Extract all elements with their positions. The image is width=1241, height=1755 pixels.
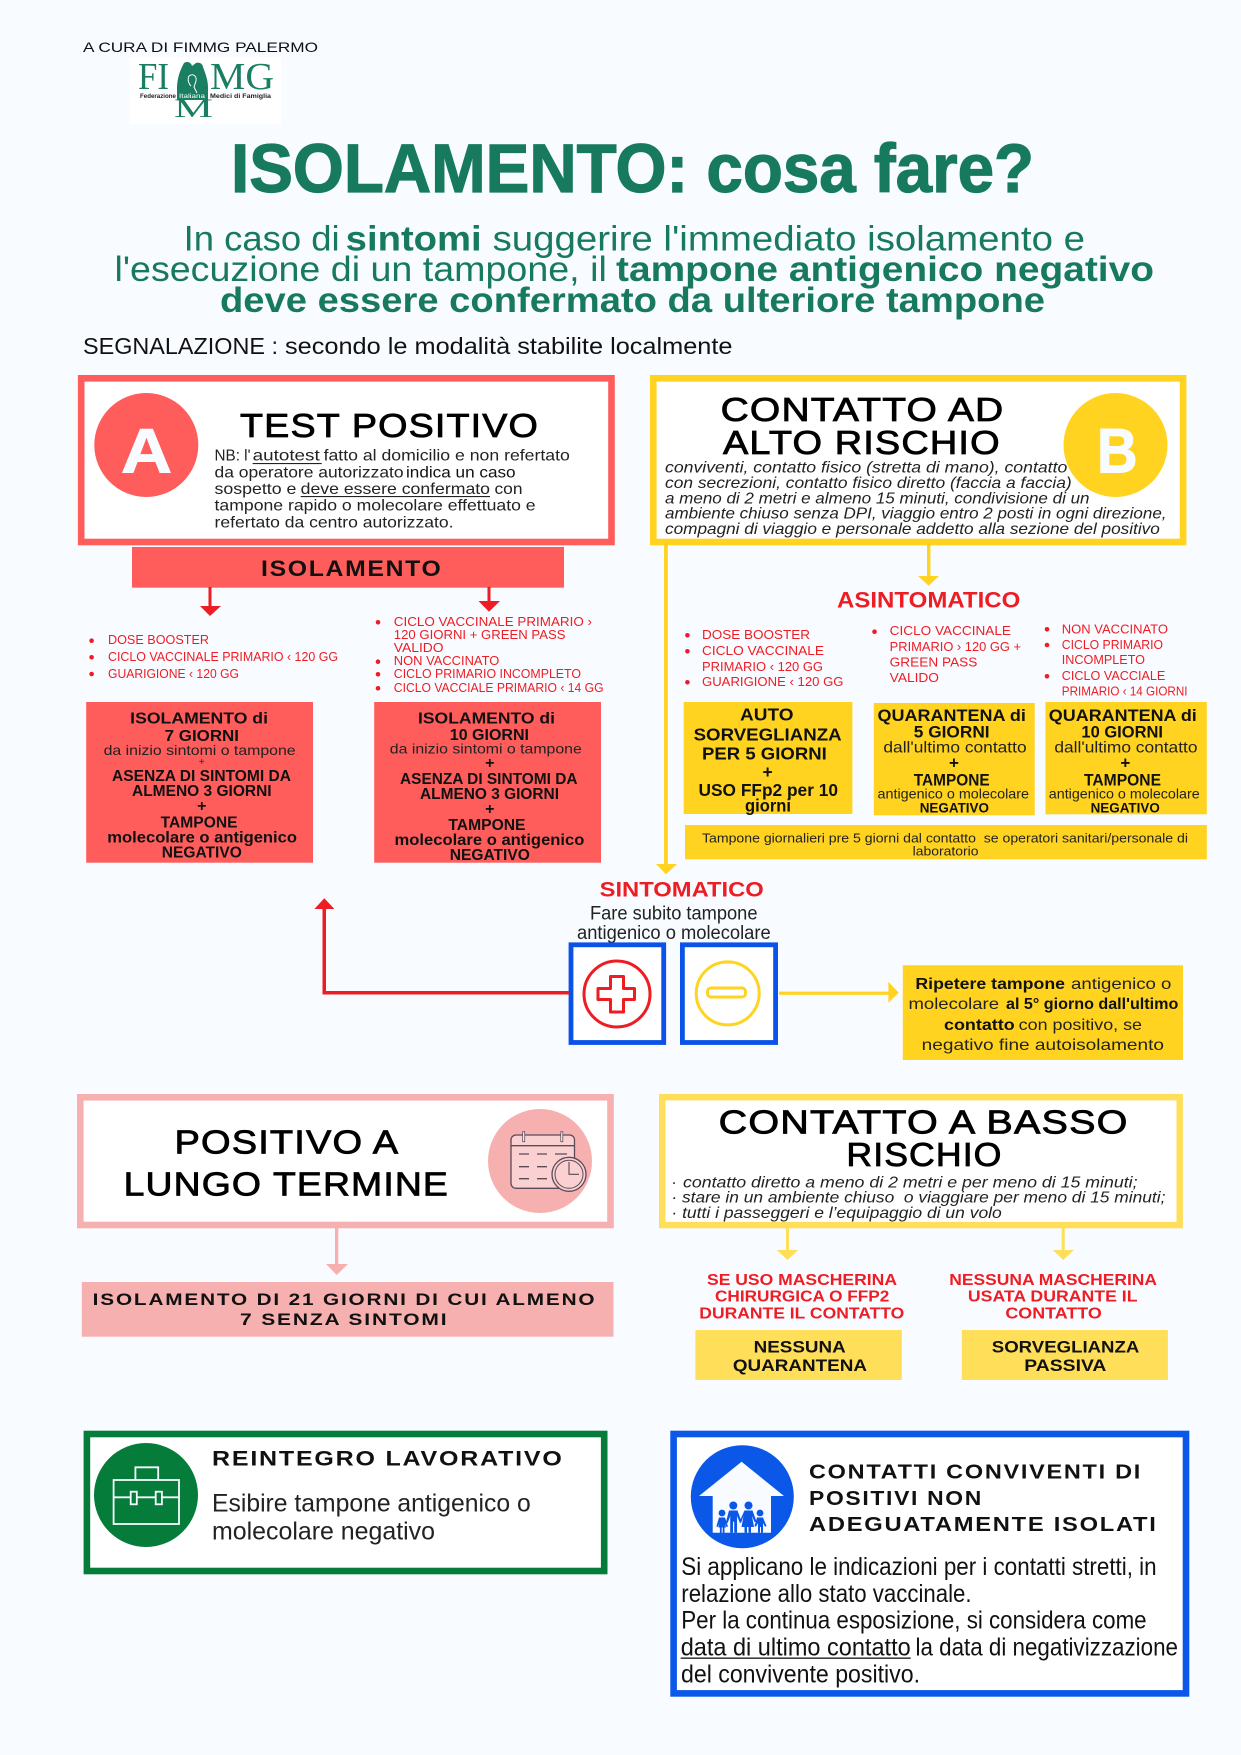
box: isolamento 21 giorni: 7 SENZA SINTOMI xyxy=(240,1310,448,1329)
definition list: · tutti i passeggeri e l’equipaggio di un volo xyxy=(671,1205,1002,1222)
note text: da operatore autorizzato xyxy=(214,465,404,482)
box: quarantena 5 giorni: NEGATIVO xyxy=(920,800,989,816)
box: auto sorveglianza: USO FFp2 per 10 xyxy=(698,780,838,800)
list: quarantena 10 giorni criteria: INCOMPLETO xyxy=(1062,652,1145,667)
box: auto sorveglianza: PER 5 GIORNI xyxy=(702,743,827,763)
panel: contatto a basso rischio xyxy=(662,1097,1180,1225)
box: isolamento 7 giorni: ISOLAMENTO di xyxy=(130,710,268,727)
list: 10-day criteria: 120 GIORNI + GREEN PASS xyxy=(394,627,566,642)
logo: FIMMG: Italiana xyxy=(179,93,205,100)
list: 10-day criteria: CICLO VACCINALE PRIMARIO › xyxy=(394,614,592,629)
box: isolamento 10 giorni: NEGATIVO xyxy=(450,847,530,864)
reporting note: SEGNALAZIONE : xyxy=(83,333,278,359)
panel: contatti conviventi xyxy=(674,1434,1186,1693)
logo: FIMMG: Medici di Famiglia xyxy=(210,93,271,100)
subtitle xyxy=(114,220,1154,320)
box: quarantena 10 giorni xyxy=(1046,702,1207,816)
heading: asintomatico: ASINTOMATICO xyxy=(837,588,1020,613)
icon: house with family xyxy=(691,1445,794,1548)
list: quarantena 10 giorni criteria xyxy=(1045,621,1188,699)
note text xyxy=(214,448,570,532)
subtitle: deve essere confermato da ulteriore tampone xyxy=(220,281,1045,320)
box: ripetere tampone: antigenico o xyxy=(1071,976,1172,993)
instruction: fare subito tampone xyxy=(577,903,771,944)
note text: autotest xyxy=(253,448,320,465)
result box: positive xyxy=(571,945,664,1042)
list: 7-day criteria: DOSE BOOSTER xyxy=(108,632,209,647)
box: quarantena 10 giorni: + xyxy=(1120,754,1130,773)
icon: calendar with clock xyxy=(488,1109,592,1213)
box: isolamento 7 giorni: da inizio sintomi o tampone xyxy=(104,742,296,758)
box: quarantena 5 giorni xyxy=(874,703,1035,816)
badge A: A xyxy=(121,417,172,487)
list: auto-sorveglianza criteria: CICLO VACCINALE xyxy=(702,643,824,658)
heading: REINTEGRO LAVORATIVO xyxy=(212,1448,564,1471)
box: quarantena 10 giorni: 10 GIORNI xyxy=(1081,723,1163,742)
logo: FIMMG: Federazione xyxy=(140,93,176,100)
box: isolamento 7 giorni: TAMPONE xyxy=(161,814,238,831)
arrow: right isolation branch xyxy=(478,587,500,612)
label: se uso mascherina xyxy=(699,1272,904,1323)
arrow: lungo termine xyxy=(326,1228,348,1275)
subtitle: In caso di xyxy=(184,220,340,258)
list: 10-day criteria: CICLO PRIMARIO INCOMPLETO xyxy=(394,666,581,681)
label: se uso mascherina: SE USO MASCHERINA xyxy=(707,1272,897,1289)
result box: negative xyxy=(682,945,776,1042)
body text: relazione allo stato vaccinale. xyxy=(681,1581,972,1608)
body text: la data di negativizzazione xyxy=(916,1634,1178,1661)
definition list xyxy=(671,1175,1165,1222)
heading: CONTATTO AD xyxy=(721,392,1004,429)
heading: TEST POSITIVO xyxy=(240,408,539,445)
logo: FIMMG: FI xyxy=(138,56,169,98)
arrow: negative to repeat test xyxy=(779,982,899,1003)
box: isolamento 10 giorni: TAMPONE xyxy=(448,817,526,834)
list: auto-sorveglianza criteria xyxy=(685,627,844,689)
box: isolamento 7 giorni: 7 GIORNI xyxy=(165,728,239,745)
list: 7-day criteria xyxy=(89,632,338,681)
box: auto sorveglianza: AUTO xyxy=(740,705,794,725)
box: quarantena 5 giorni: QUARANTENA di xyxy=(878,706,1026,725)
box: isolamento 10 giorni xyxy=(374,702,601,864)
box: quarantena 10 giorni: antigenico o molecolare xyxy=(1049,786,1200,802)
box: quarantena 5 giorni: TAMPONE xyxy=(914,771,990,790)
box: isolamento 21 giorni: ISOLAMENTO DI 21 GIORNI DI CUI ALMENO xyxy=(93,1290,596,1309)
box: ripetere tampone xyxy=(903,965,1183,1060)
box: sorveglianza passiva: PASSIVA xyxy=(1024,1356,1106,1375)
note: tamponi operatori sanitari: Tampone giornalieri pre 5 giorni dal contatto se operatori sanitari/personale di xyxy=(702,832,1188,846)
box: ripetere tampone: Ripetere tampone xyxy=(915,976,1065,993)
box: isolamento 10 giorni: ASENZA DI SINTOMI DA xyxy=(400,771,578,788)
box: isolamento 10 giorni: da inizio sintomi o tampone xyxy=(390,740,582,756)
box: isolamento 7 giorni: molecolare o antigenico xyxy=(107,829,297,846)
box: auto sorveglianza xyxy=(684,702,852,816)
heading: ALTO RISCHIO xyxy=(723,425,1001,462)
reporting note: secondo le modalità stabilite localmente xyxy=(285,333,732,359)
definition list: contatto diretto a meno di 2 metri e per meno di 15 minuti; xyxy=(683,1175,1138,1192)
label: nessuna mascherina: USATA DURANTE IL xyxy=(968,1289,1138,1306)
list: quarantena 5 giorni criteria: PRIMARIO › 120 GG + xyxy=(890,639,1021,654)
credit line: A CURA DI FIMMG PALERMO xyxy=(83,39,318,55)
definition list: · xyxy=(671,1175,677,1192)
box: ripetere tampone: al 5° giorno dall'ultimo xyxy=(1006,996,1179,1013)
list: quarantena 10 giorni criteria: CICLO PRIMARIO xyxy=(1062,637,1163,652)
heading: sintomatico: SINTOMATICO xyxy=(600,879,764,902)
panel: contatto ad alto rischio xyxy=(653,378,1183,542)
list: auto-sorveglianza criteria: DOSE BOOSTER xyxy=(702,627,810,642)
arrow: positive to isolation xyxy=(314,898,569,994)
box: isolamento 21 giorni xyxy=(82,1282,614,1337)
box: sorveglianza passiva: SORVEGLIANZA xyxy=(992,1337,1139,1356)
definition text: compagni di viaggio e personale addetto alla sezione del positivo xyxy=(665,521,1160,538)
box: quarantena 10 giorni: QUARANTENA di xyxy=(1049,706,1197,725)
body text: Si applicano le indicazioni per i contatti stretti, in xyxy=(681,1554,1157,1581)
arrow: senza mascherina xyxy=(1053,1228,1074,1260)
body text: data di ultimo contatto xyxy=(681,1634,911,1661)
heading xyxy=(719,1104,1129,1174)
definition text: con secrezioni, contatto fisico diretto (faccia a faccia) xyxy=(665,475,1072,492)
box: isolamento 10 giorni: 10 GIORNI xyxy=(450,727,529,744)
box: isolamento 7 giorni: ALMENO 3 GIORNI xyxy=(132,783,272,800)
subtitle: suggerire l'immediato isolamento e xyxy=(493,220,1085,258)
box: quarantena 10 giorni: TAMPONE xyxy=(1084,771,1161,790)
box: auto sorveglianza: SORVEGLIANZA xyxy=(694,725,842,745)
body text: Esibire tampone antigenico o xyxy=(212,1491,531,1518)
box: ripetere tampone: negativo fine autoisolamento xyxy=(922,1037,1164,1054)
arrow: con mascherina xyxy=(777,1228,798,1260)
note text: sospetto e xyxy=(214,481,297,498)
box: isolamento 7 giorni: + xyxy=(197,798,206,815)
arrow: left isolation branch xyxy=(200,587,221,616)
panel: positivo a lungo termine xyxy=(80,1097,611,1225)
box: isolamento 10 giorni: ALMENO 3 GIORNI xyxy=(420,786,559,803)
subtitle: l'esecuzione di un tampone, il xyxy=(114,250,607,289)
note text: tampone rapido o molecolare effettuato e xyxy=(214,498,536,515)
body text: del convivente positivo. xyxy=(681,1661,920,1688)
logo: FIMMG: MG xyxy=(210,56,274,98)
list: 10-day criteria: CICLO VACCIALE PRIMARIO ‹ 14 GG xyxy=(394,680,604,695)
note text: NB: l' xyxy=(214,448,250,465)
arrow: to asintomatico xyxy=(918,545,939,586)
badge B xyxy=(1064,393,1168,497)
heading: ADEGUATAMENTE ISOLATI xyxy=(809,1513,1158,1536)
heading: CONTATTO A BASSO xyxy=(719,1104,1129,1141)
badge A xyxy=(94,393,198,497)
label: nessuna mascherina xyxy=(949,1272,1157,1323)
list: 10-day criteria: NON VACCINATO xyxy=(394,653,499,668)
banner: isolamento xyxy=(132,547,564,588)
note text: indica un caso xyxy=(406,465,516,482)
box: ripetere tampone: contatto xyxy=(944,1017,1015,1034)
heading: POSITIVO A xyxy=(174,1124,399,1161)
list: quarantena 5 giorni criteria xyxy=(872,623,1021,685)
list: quarantena 5 giorni criteria: GREEN PASS xyxy=(890,655,977,670)
list: quarantena 10 giorni criteria: NON VACCINATO xyxy=(1062,621,1168,636)
heading: LUNGO TERMINE xyxy=(124,1167,449,1204)
definition text xyxy=(665,460,1166,538)
title: ISOLAMENTO: cosa fare? xyxy=(231,130,1034,207)
box: quarantena 10 giorni: NEGATIVO xyxy=(1091,800,1160,816)
box: isolamento 7 giorni: ASENZA DI SINTOMI DA xyxy=(112,768,291,785)
box: nessuna quarantena xyxy=(695,1330,902,1380)
reporting note xyxy=(83,333,732,359)
box: isolamento 10 giorni: + xyxy=(485,755,494,772)
body text xyxy=(212,1491,531,1545)
box: auto sorveglianza: giorni xyxy=(745,796,791,816)
label: nessuna mascherina: NESSUNA MASCHERINA xyxy=(949,1272,1157,1289)
box: quarantena 5 giorni: antigenico o molecolare xyxy=(878,786,1029,802)
box: isolamento 7 giorni xyxy=(86,702,313,863)
list: auto-sorveglianza criteria: GUARIGIONE ‹ 120 GG xyxy=(702,674,844,689)
box: quarantena 5 giorni: 5 GIORNI xyxy=(914,723,990,742)
list: 7-day criteria: CICLO VACCINALE PRIMARIO ‹ 120 GG xyxy=(108,649,338,664)
box: isolamento 10 giorni: molecolare o antigenico xyxy=(394,832,584,849)
box: nessuna quarantena: QUARANTENA xyxy=(733,1356,867,1375)
box: isolamento 10 giorni: + xyxy=(485,801,494,818)
definition text: ambiente chiuso senza DPI, viaggio entro 2 posti in ogni direzione, xyxy=(665,506,1166,523)
list: 7-day criteria: GUARIGIONE ‹ 120 GG xyxy=(108,666,239,681)
list: quarantena 10 giorni criteria: CICLO VACCIALE xyxy=(1062,668,1165,683)
body text xyxy=(681,1554,1178,1688)
label: nessuna mascherina: CONTATTO xyxy=(1005,1306,1102,1323)
box: quarantena 5 giorni: dall'ultimo contatto xyxy=(883,740,1027,757)
panel: test positivo xyxy=(81,378,611,542)
box: ripetere tampone: con positivo, se xyxy=(1019,1017,1142,1034)
note: tamponi operatori sanitari: laboratorio xyxy=(913,845,979,859)
heading: CONTATTI CONVIVENTI DI xyxy=(809,1460,1142,1483)
box: auto sorveglianza: + xyxy=(762,762,773,782)
heading xyxy=(721,392,1004,462)
instruction: fare subito tampone: antigenico o molecolare xyxy=(577,923,771,944)
logo: FIMMG xyxy=(130,56,281,124)
note text: con xyxy=(494,481,522,498)
box: sorveglianza passiva xyxy=(962,1330,1168,1380)
note text: fatto al domicilio e non refertato xyxy=(324,448,570,465)
badge B: B xyxy=(1097,417,1138,487)
list: quarantena 5 giorni criteria: CICLO VACCINALE xyxy=(890,623,1011,638)
list: 10-day criteria: VALIDO xyxy=(394,640,444,655)
label: se uso mascherina: DURANTE IL CONTATTO xyxy=(699,1306,904,1323)
box: isolamento 7 giorni: NEGATIVO xyxy=(162,844,242,861)
list: auto-sorveglianza criteria: PRIMARIO ‹ 120 GG xyxy=(702,659,823,674)
body text: molecolare negativo xyxy=(212,1518,435,1545)
definition list: · stare in un ambiente chiuso o viaggiare per meno di 15 minuti; xyxy=(671,1190,1165,1207)
box: isolamento 10 giorni: ISOLAMENTO di xyxy=(418,710,555,727)
banner: isolamento: ISOLAMENTO xyxy=(261,556,442,581)
heading: POSITIVI NON xyxy=(809,1487,983,1510)
label: se uso mascherina: CHIRURGICA O FFP2 xyxy=(715,1289,889,1306)
heading xyxy=(124,1124,449,1204)
box: quarantena 10 giorni: dall'ultimo contatto xyxy=(1054,740,1198,757)
list: quarantena 10 giorni criteria: PRIMARIO ‹ 14 GIORNI xyxy=(1062,684,1188,699)
body text: Per la continua esposizione, si considera come xyxy=(681,1607,1147,1634)
box: ripetere tampone: molecolare xyxy=(908,996,999,1013)
arrow: to sintomatico xyxy=(656,545,677,874)
definition text: a meno di 2 metri e almeno 15 minuti, condivisione di un xyxy=(665,490,1090,507)
box: isolamento 7 giorni: + xyxy=(199,757,205,768)
list: 10-day criteria xyxy=(376,614,604,695)
box: quarantena 5 giorni: + xyxy=(949,754,959,773)
heading: RISCHIO xyxy=(846,1137,1002,1174)
panel: reintegro lavorativo xyxy=(87,1434,604,1571)
note: tamponi operatori sanitari xyxy=(685,825,1207,859)
note text: deve essere confermato xyxy=(301,481,490,498)
subtitle: sintomi xyxy=(346,220,482,258)
box: nessuna quarantena: NESSUNA xyxy=(754,1337,846,1356)
note text: refertato da centro autorizzato. xyxy=(214,515,454,532)
instruction: fare subito tampone: Fare subito tampone xyxy=(590,903,758,924)
subtitle: tampone antigenico negativo xyxy=(616,250,1154,289)
heading xyxy=(809,1460,1158,1536)
logo: FIMMG: M xyxy=(174,94,213,123)
list: quarantena 5 giorni criteria: VALIDO xyxy=(890,670,939,685)
definition text: conviventi, contatto fisico (stretta di mano), contatto xyxy=(665,460,1067,477)
icon: briefcase xyxy=(94,1443,198,1547)
